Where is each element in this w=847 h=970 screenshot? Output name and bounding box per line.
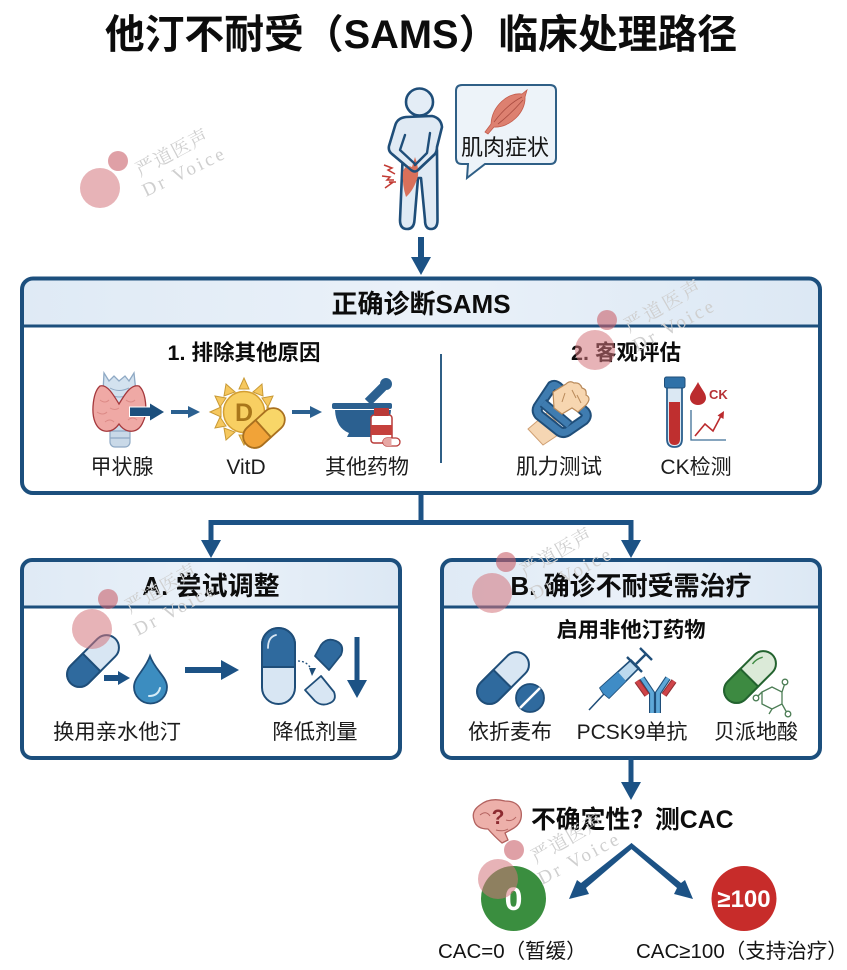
title: 他汀不耐受（SAMS）临床处理路径 bbox=[105, 13, 737, 57]
icon: capsule bbox=[62, 630, 124, 692]
arrow: to other drugs bbox=[292, 406, 322, 418]
icon: painful thigh muscle bbox=[403, 157, 418, 197]
panel: correct diagnosis of SAMS bbox=[22, 278, 820, 493]
icon: ezetimibe capsule and tablet bbox=[472, 647, 544, 712]
arrow: to CAC 100 bbox=[629, 843, 693, 899]
label: CAC 0 defer: CAC=0（暂缓） bbox=[438, 940, 587, 963]
arrow: symptoms to diagnosis bbox=[411, 237, 431, 275]
icon: bempedoic acid capsule and molecule bbox=[719, 646, 791, 717]
watermark: diagnosis panel bbox=[575, 274, 720, 370]
arrow: to CAC 0 bbox=[569, 843, 634, 899]
callout text: 肌肉症状 bbox=[461, 135, 549, 160]
badge: CAC at least 100 bbox=[712, 866, 776, 931]
watermark: top left: 严道医声 bbox=[132, 124, 213, 181]
panel: B confirmed intolerance needs treatment bbox=[442, 560, 820, 758]
icon: grip strength test bbox=[528, 382, 589, 445]
badge: CAC at least 100: ≥100 bbox=[717, 886, 771, 913]
label: CK test: CK检测 bbox=[660, 456, 732, 479]
icon: thyroid bbox=[93, 373, 146, 447]
icon: CK blood test: CK bbox=[709, 387, 728, 402]
watermark: panel B: Dr Voice bbox=[526, 543, 617, 604]
watermark: panel A: Dr Voice bbox=[130, 579, 221, 640]
watermark: CAC: Dr Voice bbox=[534, 828, 625, 889]
badge: CAC 0 bbox=[481, 866, 546, 931]
label: ezetimibe: 依折麦布 bbox=[468, 721, 552, 744]
badge: CAC 0: 0 bbox=[505, 881, 522, 917]
watermark: top left bbox=[80, 124, 230, 208]
arrow: thyroid outgoing bbox=[130, 404, 164, 420]
icon: muscle bbox=[485, 90, 527, 134]
icon: CK blood test bbox=[664, 377, 728, 447]
label: CAC 100 supports treatment: CAC≥100（支持治疗） bbox=[636, 940, 847, 963]
icon: vertical capsule and split halves bbox=[262, 628, 342, 705]
icon: mortar, pestle and medicine bottle bbox=[332, 378, 400, 446]
arrow: capsule to water bbox=[104, 671, 130, 685]
heading: A: A. 尝试调整 bbox=[142, 571, 280, 601]
heading: objective assessment: 2. 客观评估 bbox=[571, 340, 681, 365]
label: other drugs: 其他药物 bbox=[325, 456, 409, 479]
label: grip test: 肌力测试 bbox=[516, 455, 602, 479]
label: PCSK9 antibody: PCSK9单抗 bbox=[577, 721, 687, 744]
icon: brain with question mark bbox=[473, 800, 521, 843]
watermark: top left: Dr Voice bbox=[139, 143, 230, 201]
watermark: panel B: 严道医声 bbox=[516, 523, 597, 582]
label: bempedoic acid: 贝派地酸 bbox=[714, 721, 798, 744]
arrow: to vitamin D bbox=[171, 406, 200, 418]
subheading: start non-statin drugs: 启用非他汀药物 bbox=[556, 618, 706, 642]
watermark: CAC bbox=[478, 809, 625, 899]
arrow: dose decrease bbox=[347, 637, 367, 698]
icon: brain with question mark: ? bbox=[492, 806, 504, 829]
heading: exclude other causes: 1. 排除其他原因 bbox=[168, 340, 320, 365]
arrow: panel B to CAC bbox=[621, 758, 641, 800]
watermark: diagnosis panel: Dr Voice bbox=[629, 295, 720, 356]
label: lower dose: 降低剂量 bbox=[272, 720, 358, 744]
watermark: panel A: 严道医声 bbox=[122, 559, 202, 618]
label: switch to hydrophilic statin: 换用亲水他汀 bbox=[53, 720, 181, 744]
arrow: switch to lower dose bbox=[185, 660, 239, 680]
watermark: panel B bbox=[472, 523, 617, 613]
icon: vitamin D sun and capsule: D bbox=[235, 399, 253, 427]
watermark: CAC: 严道医声 bbox=[528, 809, 608, 868]
heading: uncertainty test CAC: 不确定性？测CAC bbox=[531, 806, 734, 834]
icon: vitamin D sun and capsule bbox=[210, 378, 290, 453]
callout: muscle symptoms bbox=[456, 85, 556, 178]
icon: water drop bbox=[134, 656, 167, 704]
heading: correct diagnosis: 正确诊断SAMS bbox=[331, 289, 511, 319]
arrow: branches to panels A and B bbox=[201, 494, 641, 558]
icon: pain lightning marks bbox=[382, 165, 396, 188]
panel: A try adjusting bbox=[22, 560, 400, 758]
watermark: diagnosis panel: 严道医声 bbox=[620, 274, 708, 337]
label: thyroid: 甲状腺 bbox=[90, 456, 154, 479]
heading: B: B. 确诊不耐受需治疗 bbox=[510, 571, 752, 601]
watermark: panel A bbox=[72, 559, 221, 649]
icon: person with muscle pain bbox=[382, 88, 442, 229]
icon: syringe and antibody bbox=[589, 648, 674, 713]
label: vitamin D: VitD bbox=[226, 456, 266, 479]
